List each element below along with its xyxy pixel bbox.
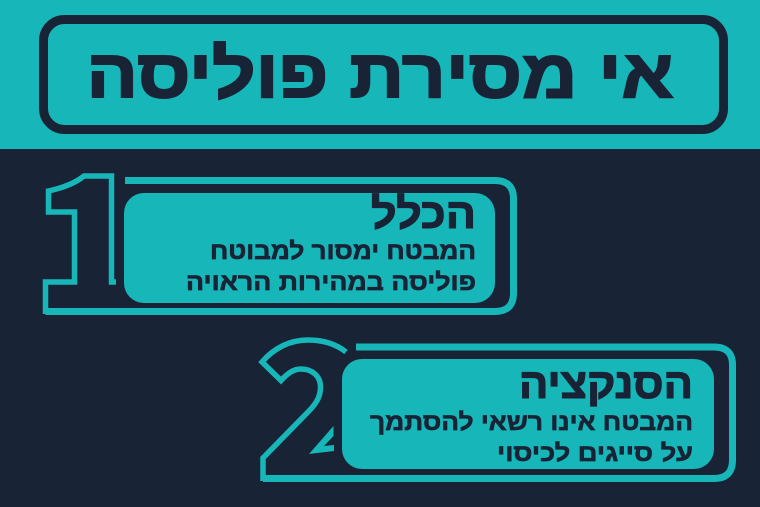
heading 2: הסנקציה (519, 360, 693, 407)
panel 2 (342, 359, 714, 469)
section 1: rule (46, 176, 514, 314)
body 1 line 2: פוליסה במהירות הראויה (186, 269, 476, 296)
panel 1 (124, 193, 495, 303)
header band (0, 0, 760, 149)
numeral 1 and frame outline (46, 180, 514, 312)
numeral 2 outline (262, 340, 346, 481)
section 2: sanction (262, 340, 732, 481)
body 2 line 2: על סייגים לכיסוי (497, 440, 693, 467)
body 1 line 1: המבטח ימסור למבוטח (210, 238, 476, 265)
heading 1: הכלל (371, 190, 476, 237)
title frame (44, 20, 724, 130)
frame outline 2 (263, 347, 732, 478)
numeral 1 outline (46, 176, 116, 314)
numeral 2 inner notch (309, 426, 334, 454)
title: אי מסירת פוליסה (86, 36, 674, 112)
body 2 line 1: המבטח אינו רשאי להסתמך (370, 409, 693, 436)
